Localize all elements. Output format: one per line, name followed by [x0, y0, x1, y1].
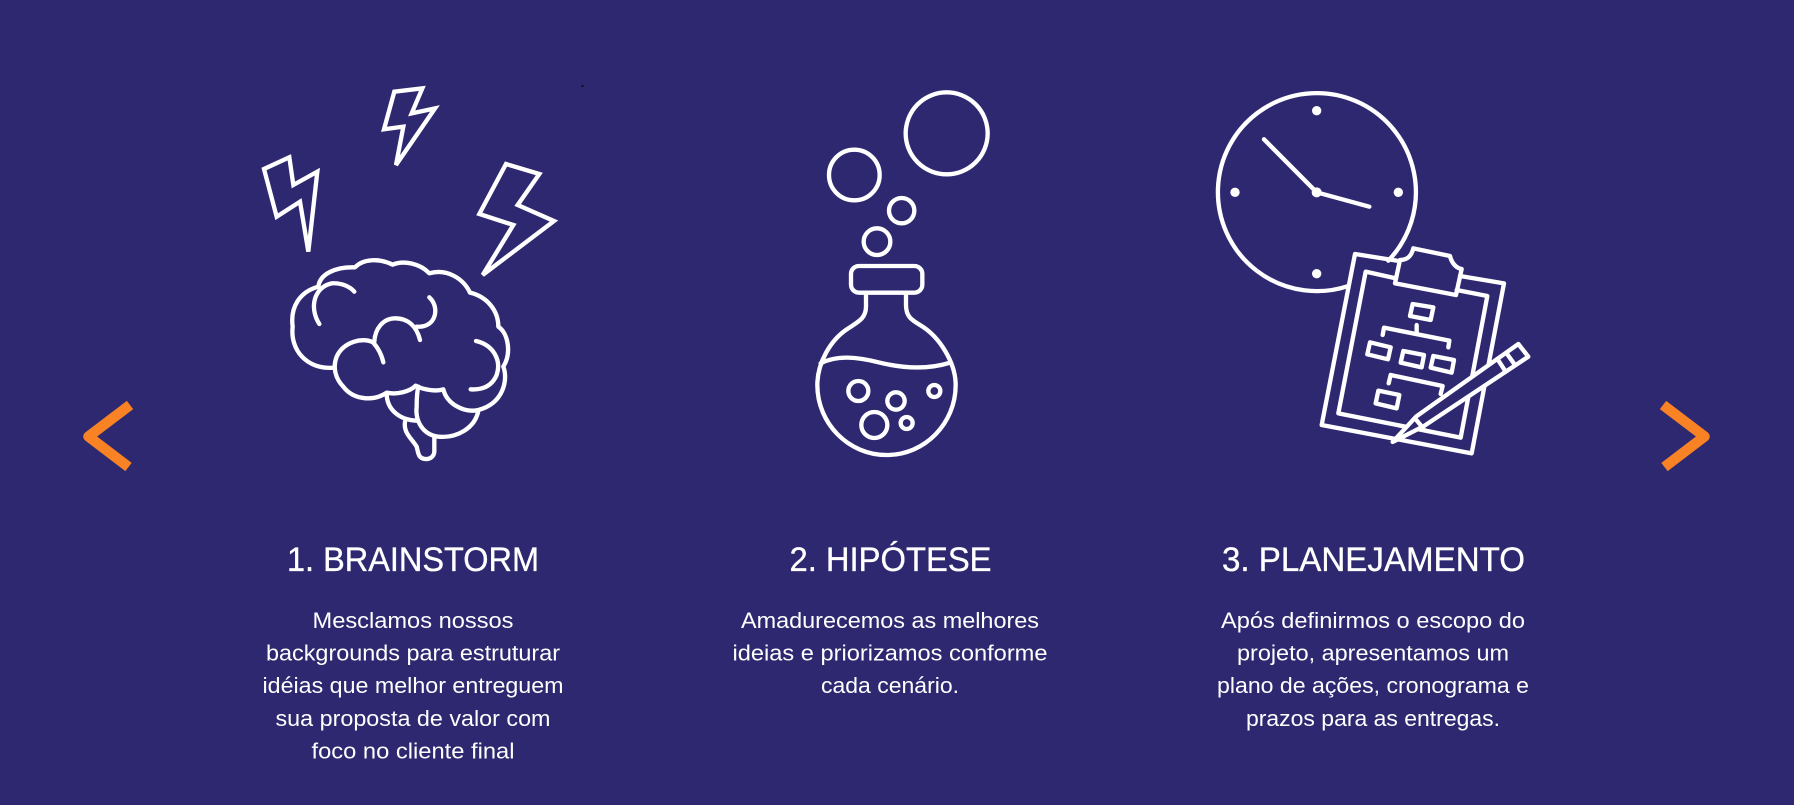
text block: brainstorm description: backgrounds para estruturar [266, 640, 560, 666]
text block: hipótese description: Amadurecemos as melhores [741, 608, 1039, 633]
icon: flask with bubbles [817, 92, 988, 455]
text block: brainstorm description: Mesclamos nossos [312, 608, 514, 633]
text block: brainstorm description: foco no cliente final [312, 738, 514, 764]
text block: planejamento description: prazos para as entregas. [1246, 706, 1500, 731]
text block: brainstorm description: idéias que melhor entreguem [262, 673, 564, 698]
text block: hipótese description: ideias e priorizamos conforme [732, 640, 1048, 666]
panel: planejamento [1217, 93, 1529, 731]
text block: planejamento description: Após definirmos o escopo do [1221, 608, 1525, 633]
heading: 1. Brainstorm: 1. BRAINSTORM [287, 541, 539, 579]
text block: hipótese description: cada cenário. [821, 673, 959, 698]
heading: 2. Hipótese: 2. HIPÓTESE [790, 540, 992, 579]
text block: brainstorm description: sua proposta de valor com [276, 706, 550, 731]
heading: 3. Planejamento: 3. PLANEJAMENTO [1222, 541, 1525, 579]
text block: planejamento description: projeto, apresentamos um [1237, 640, 1509, 666]
icon: clock, clipboard and pencil [1218, 93, 1528, 453]
panel: hipótese [732, 92, 1048, 698]
icon: brain with lightning bolts [264, 88, 554, 459]
panel: brainstorm [262, 88, 564, 764]
arrow: previous [88, 405, 130, 467]
text block: brainstorm description [262, 608, 564, 764]
text block: planejamento description: plano de ações, cronograma e [1217, 673, 1529, 698]
text block: hipótese description [732, 608, 1048, 698]
arrow: next [1663, 405, 1704, 467]
text block: planejamento description [1217, 608, 1529, 731]
